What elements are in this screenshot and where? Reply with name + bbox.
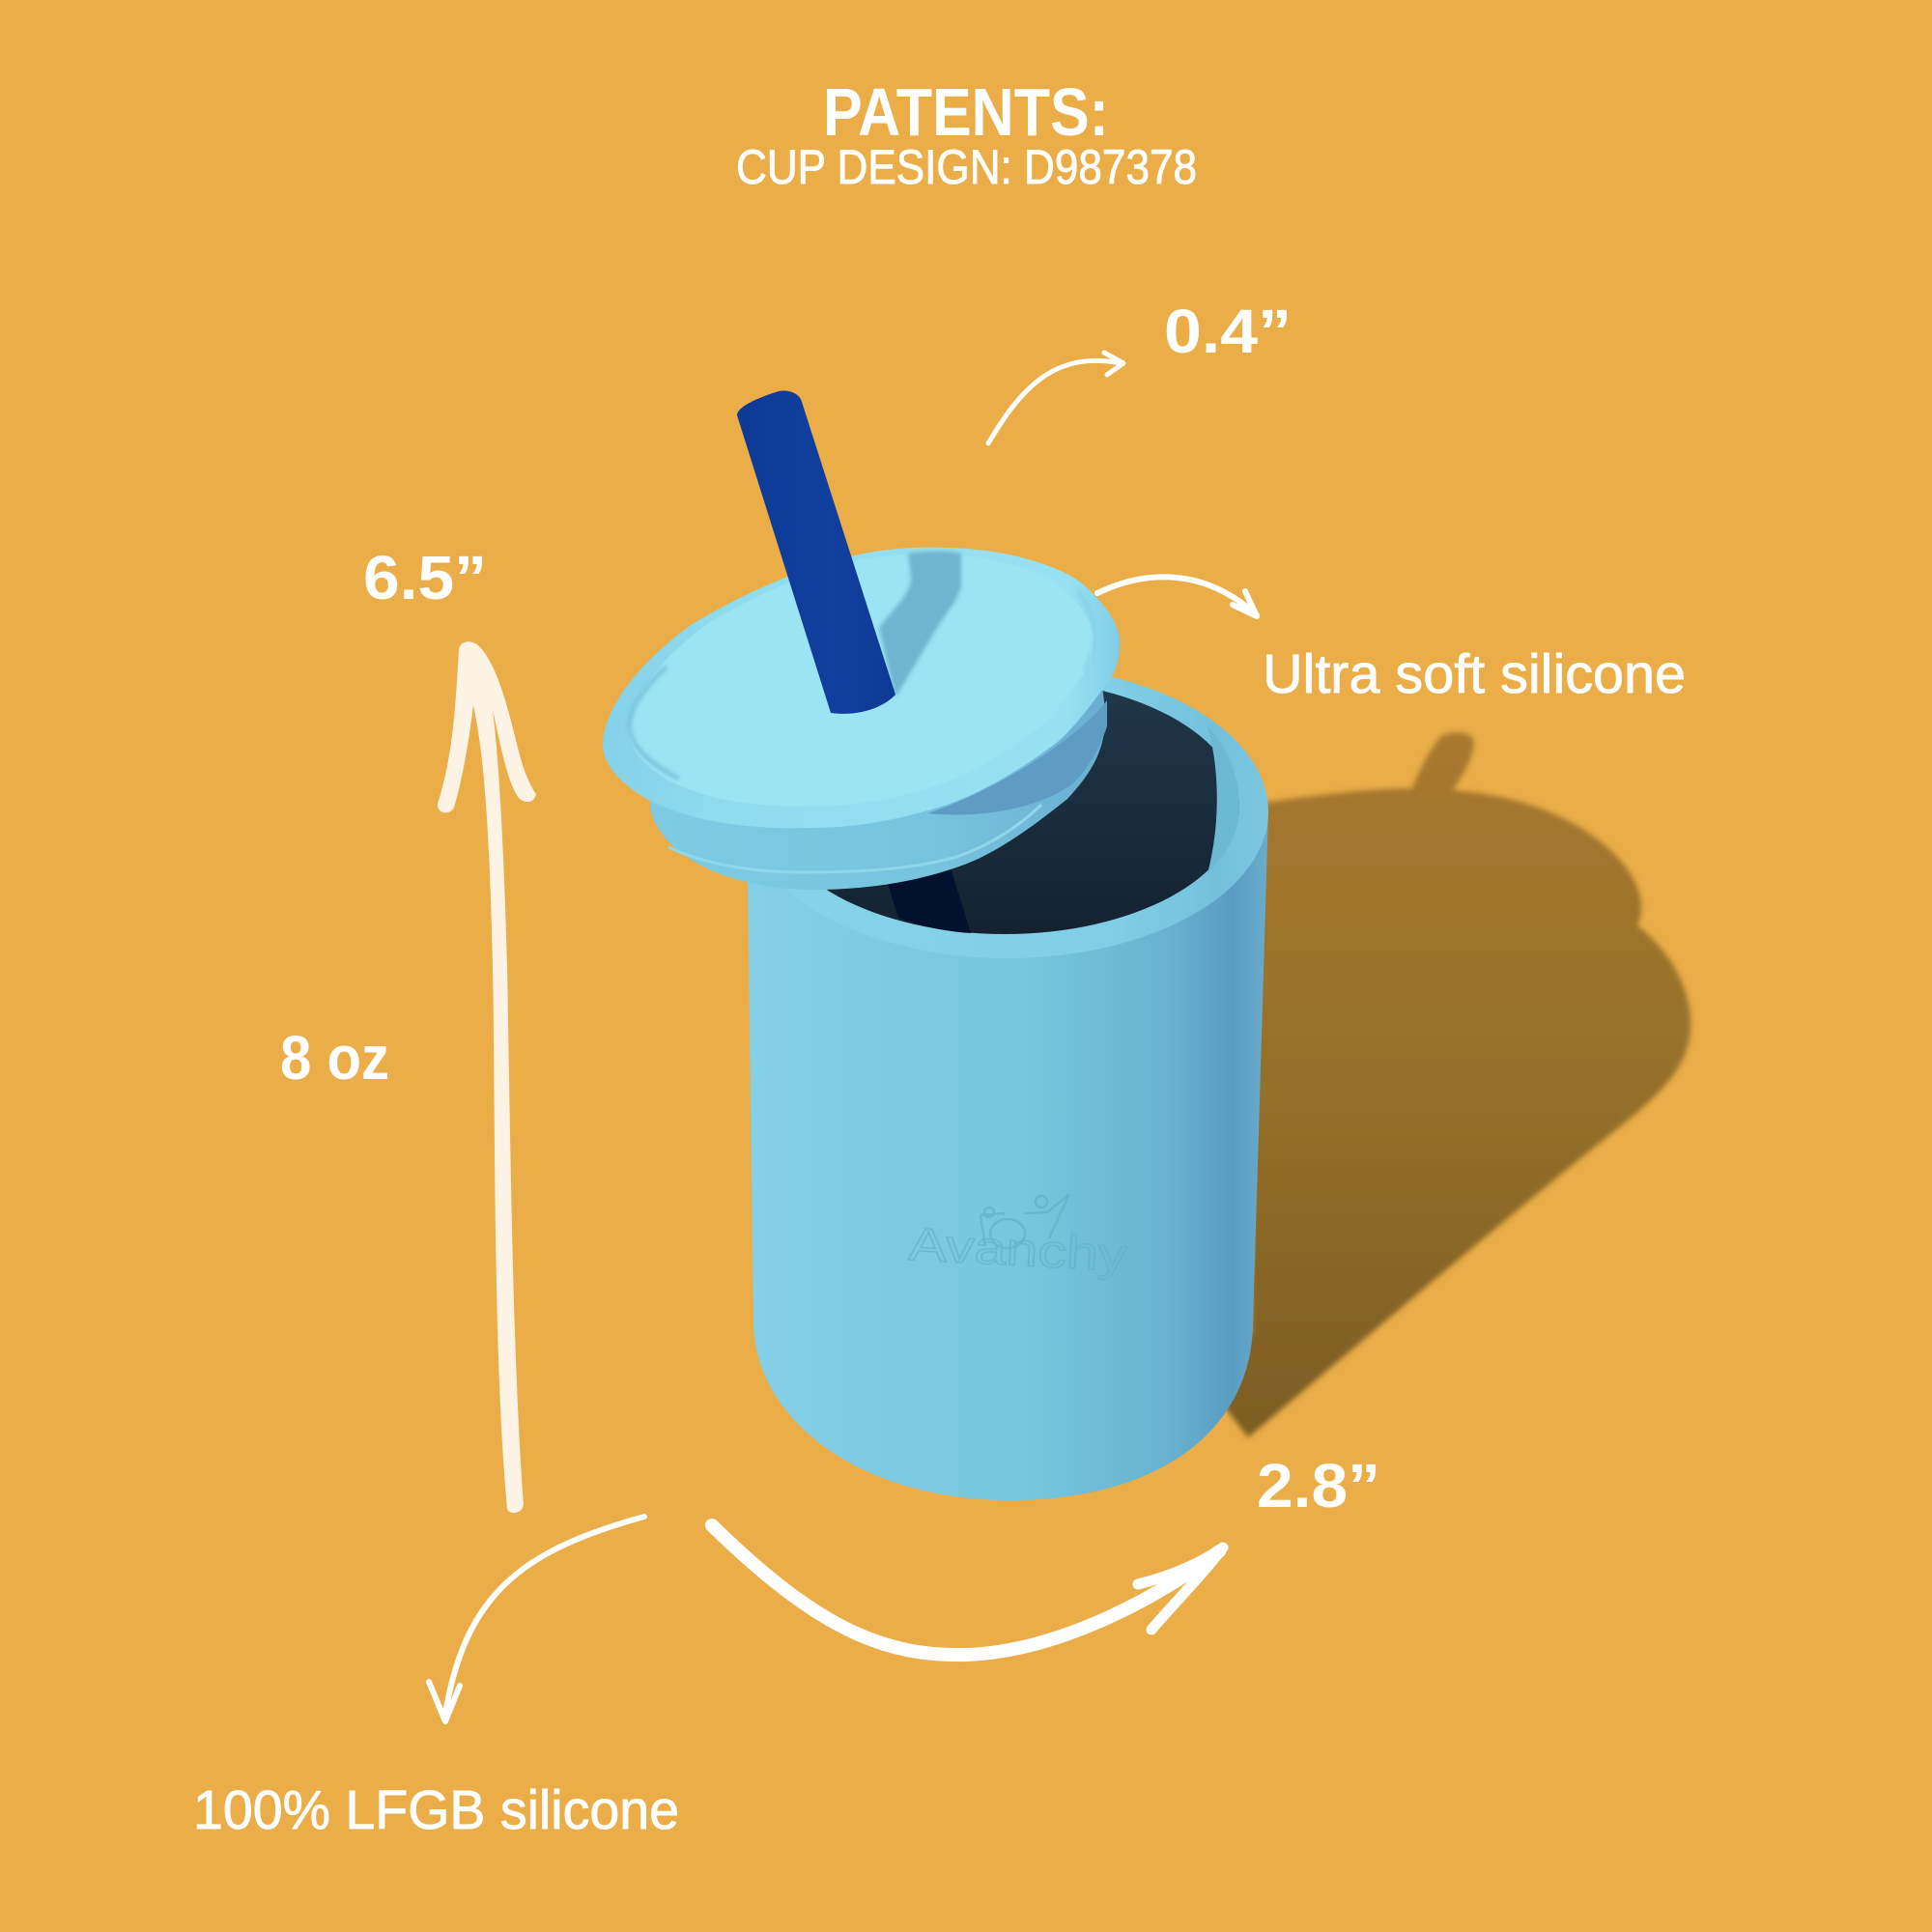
cup interior: [770, 679, 1239, 934]
lid: [603, 548, 1120, 828]
embossed logo: Avanchy: [907, 1219, 1128, 1282]
callout: 100% LFGB silicone: 100% LFGB silicone: [193, 1779, 679, 1841]
straw: [737, 391, 895, 714]
arrow: to LFGB silicone: [429, 1517, 644, 1721]
cup body: [747, 811, 1268, 1500]
capacity label: 8 oz: 8 oz: [280, 1023, 389, 1093]
interior light wall: [1208, 726, 1239, 873]
title: patents: PATENTS:: [823, 74, 1109, 150]
lid crease: [630, 667, 679, 779]
straw shadow on lid: [879, 552, 961, 697]
dimension label: 6.5 inch: 6.5”: [363, 543, 487, 612]
title: patents: CUP DESIGN: D987378: [736, 140, 1197, 194]
lid underside rings: [650, 676, 1107, 890]
arrow: to ultra soft silicone: [1097, 577, 1257, 616]
dimension label: 0.4 inch: 0.4”: [1164, 297, 1292, 366]
cup: [603, 391, 1268, 1500]
width arrow: 2.8 inch: [712, 1525, 1223, 1655]
embossed logo: [907, 1194, 1128, 1282]
arrow: to 0.4 inch: [988, 353, 1123, 443]
title: patents: [736, 74, 1197, 194]
cup rim: [747, 665, 1268, 958]
cast shadow of cup: [1212, 732, 1690, 1437]
height arrow: 6.5 inch: [438, 641, 536, 1513]
straw inside cup: [888, 865, 971, 933]
callout: ultra soft silicone: Ultra soft silicone: [1263, 643, 1686, 705]
dimension label: 2.8 inch: 2.8”: [1257, 1451, 1380, 1520]
